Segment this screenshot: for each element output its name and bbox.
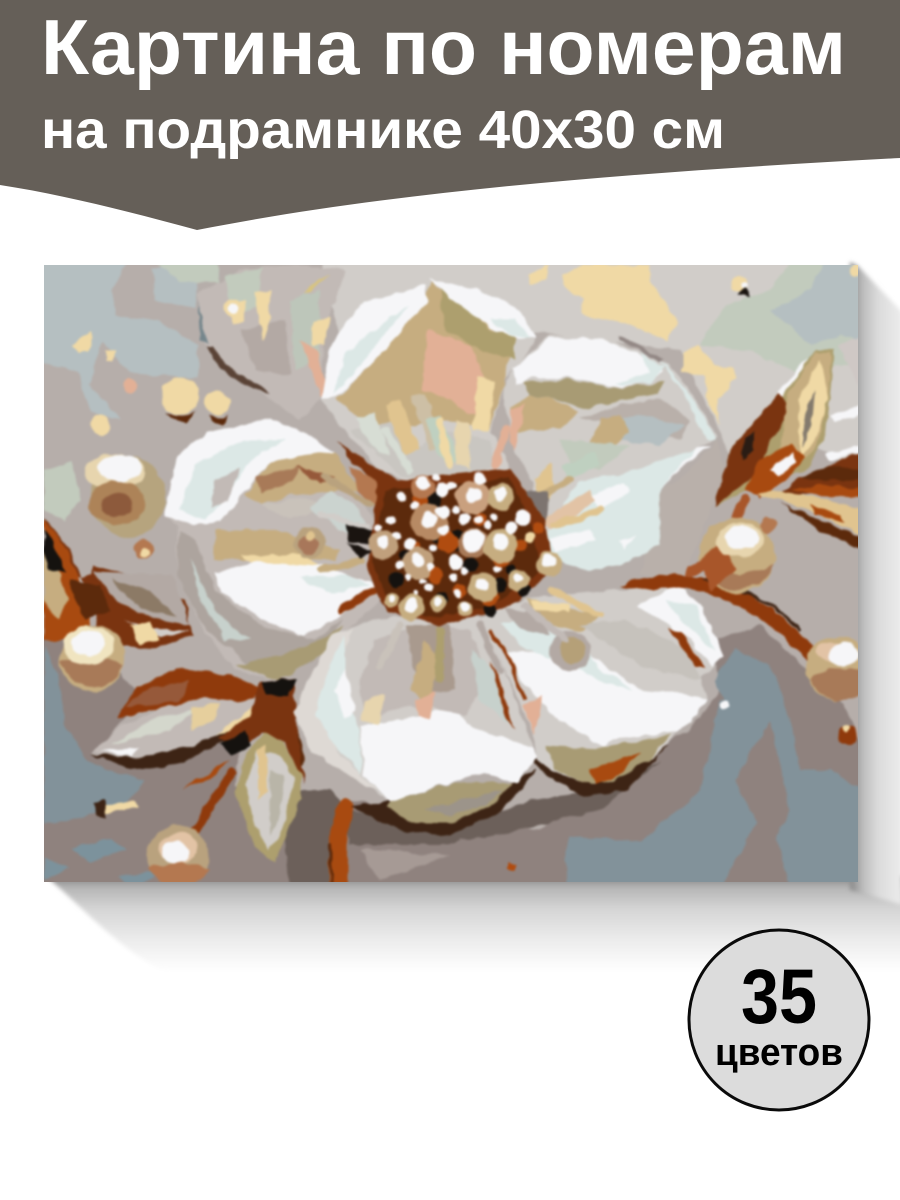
droplet accents [123,281,858,871]
subtitle: на подрамнике 40х30 см [41,100,725,160]
stamen pearls [368,472,562,620]
back petal top left [197,265,345,420]
number of colours: 35 [741,954,817,1040]
title: Картина по номерам [41,3,846,91]
rust band above lower right petal [620,572,708,592]
pearl lower left [59,625,125,691]
petal: bottom [294,615,537,835]
petal: lower right [480,585,723,797]
colours label: цветов [715,1032,843,1074]
gold splashes and droplets [73,263,863,435]
pearl right [698,517,776,593]
pearl left [85,454,166,559]
petal: left [164,418,392,680]
petal streaks around the centre [320,420,600,680]
canvas shadow [46,262,900,972]
painting: white flower with pearls [30,250,880,900]
leaves left [44,520,192,650]
pearl far right [804,636,858,703]
pearl bottom [147,825,210,887]
petal: top [321,275,537,490]
stems [190,500,812,890]
header banner [0,0,900,230]
colour count badge [689,930,869,1110]
painting background [30,250,880,900]
leaves lower left [91,668,305,864]
flower centre stamen [337,442,562,626]
leaves right [715,350,862,550]
petal: right [503,335,725,575]
